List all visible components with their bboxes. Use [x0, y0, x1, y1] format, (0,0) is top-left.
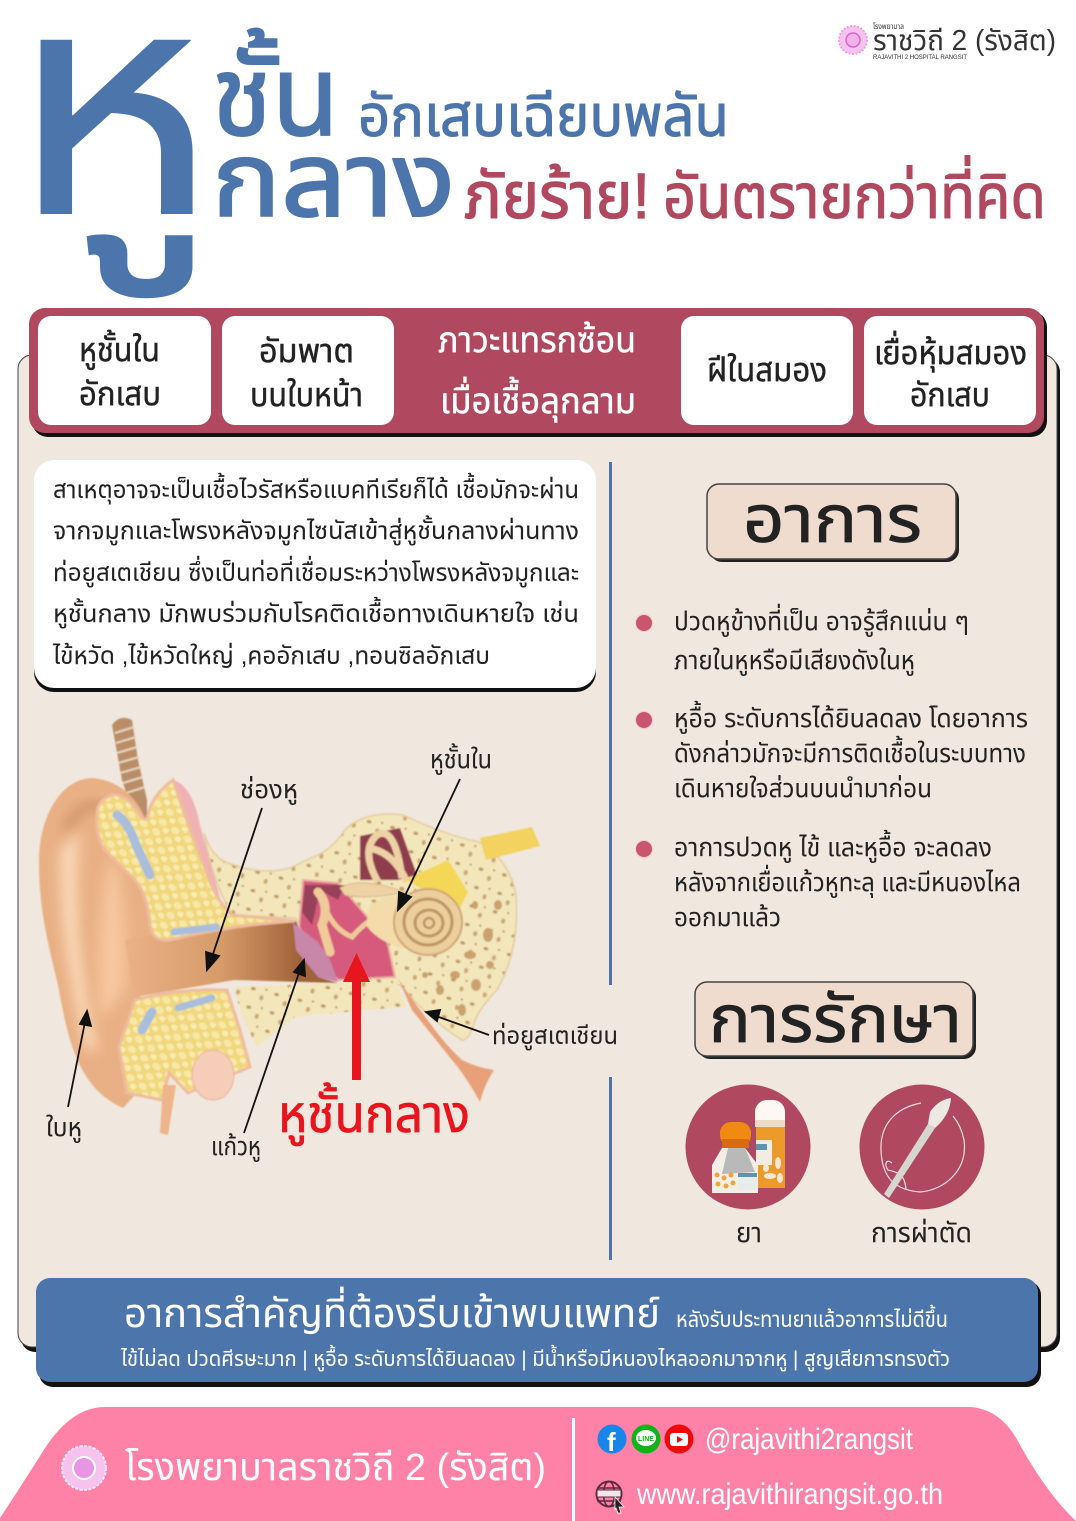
icon: youtube — [664, 1424, 694, 1454]
label: inner ear: หูชั้นใน — [430, 743, 492, 775]
heading: symptoms — [707, 482, 959, 562]
icon: surgery — [860, 1084, 984, 1210]
icon: line — [632, 1424, 660, 1454]
panel: main beige — [18, 355, 1060, 1352]
card: brain abscess — [681, 316, 853, 425]
band heading: ภาวะแทรกซ้อน — [438, 319, 636, 360]
icon: website globe — [596, 1482, 624, 1513]
label: eustachian tube: ท่อยูสเตเชียน — [492, 1022, 618, 1051]
symptom 3: หลังจากเยื่อแก้วหูทะลุ และมีหนองไหล — [674, 864, 1021, 898]
bullet 2 — [636, 712, 652, 728]
title: ภัยร้าย! — [464, 160, 650, 232]
footer logo — [62, 1446, 106, 1490]
leader lines — [68, 779, 489, 1133]
band heading: เมื่อเชื้อลุกลาม — [440, 376, 636, 422]
bullet 3 — [636, 840, 652, 858]
card: inner ear infection: อักเสบ — [79, 375, 161, 412]
band heading — [438, 319, 636, 422]
card: facial paralysis: อัมพาต — [259, 332, 354, 369]
hospital logo top right: ราชวิถี 2 (รังสิต) — [873, 25, 1056, 57]
text block: causes: ไข้หวัด ,ไข้หวัดใหญ่ ,คออักเสบ ,ทอนซิลอักเสบ — [52, 642, 490, 670]
title: อันตรายกว่าที่คิด — [663, 155, 1046, 232]
website url: www.rajavithirangsit.go.th — [636, 1478, 943, 1511]
divider lower — [609, 1077, 612, 1260]
text block: causes — [34, 460, 596, 692]
title: อักเสบเฉียบพลัน — [358, 84, 729, 149]
text block: causes: หูชั้นกลาง มักพบร่วมกับโรคติดเชื้อทางเดินหายใจ เช่น — [53, 596, 579, 629]
hospital logo top right: RAJAVITHI 2 HOSPITAL RANGSIT — [873, 54, 967, 61]
ear anatomy diagram — [39, 718, 618, 1162]
panel: urgent warning band: หลังรับประทานยาแล้วอาการไม่ดีขึ้น — [676, 1304, 948, 1332]
title — [9, 0, 1046, 298]
card: meningitis: เยื่อหุ้มสมอง — [874, 330, 1027, 373]
symptom 3 — [674, 829, 1021, 932]
text block: causes: ท่อยูสเตเชียน ซึ่งเป็นท่อที่เชื่อมระหว่างโพรงหลังจมูกและ — [53, 555, 579, 588]
card: meningitis — [864, 316, 1036, 425]
symptom 1: ปวดหูข้างที่เป็น อาจรู้สึกแน่น ๆ — [674, 603, 969, 637]
icon: facebook — [598, 1424, 626, 1457]
symptom 2: เดินหายใจส่วนบนนำมาก่อน — [674, 773, 932, 803]
social handle: @rajavithi2rangsit — [705, 1423, 914, 1456]
divider upper — [609, 462, 612, 985]
text block: causes: สาเหตุอาจจะเป็นเชื้อไวรัสหรือแบคทีเรียก็ได้ เชื้อมักจะผ่าน — [53, 472, 579, 505]
heading: symptoms: อาการ — [743, 482, 922, 556]
title: ชั้น — [212, 28, 339, 159]
card: brain abscess: ฝีในสมอง — [707, 351, 827, 388]
symptom list — [636, 603, 1028, 932]
hospital logo top right: โรงพยาบาล — [873, 22, 904, 31]
label: surgery: การผ่าตัด — [871, 1217, 972, 1248]
label: ear canal: ช่องหู — [240, 774, 298, 805]
icon: facebook: f — [607, 1427, 616, 1457]
hospital logo top right — [839, 22, 1056, 61]
card: facial paralysis — [222, 316, 394, 425]
label: eardrum: แก้วหู — [211, 1131, 261, 1162]
symptom 1: ภายในหูหรือมีเสียงดังในหู — [674, 645, 915, 676]
symptom 2: หูอื้อ ระดับการได้ยินลดลง โดยอาการ — [674, 700, 1028, 734]
ear artwork — [39, 718, 540, 1135]
card: meningitis: อักเสบ — [910, 376, 990, 413]
footer — [0, 1407, 1076, 1521]
card: facial paralysis: บนใบหน้า — [250, 376, 363, 413]
icon: medicine — [686, 1084, 810, 1210]
text block: causes: จากจมูกและโพรงหลังจมูกไซนัสเข้าสู่หูชั้นกลางผ่านทาง — [53, 514, 579, 546]
red arrow — [343, 953, 370, 1080]
title: กลาง — [212, 123, 455, 239]
symptom 3: อาการปวดหู ไข้ และหูอื้อ จะลดลง — [674, 829, 992, 863]
panel: urgent warning band — [36, 1278, 1041, 1387]
symptom 3: ออกมาแล้ว — [674, 902, 781, 932]
icon: line: LINE — [638, 1436, 654, 1443]
panel: urgent warning band: อาการสำคัญที่ต้องรีบเข้าพบแพทย์ — [124, 1286, 660, 1336]
symptom 1 — [674, 603, 969, 676]
panel: urgent warning band: ไข้ไม่ลด ปวดศีรษะมาก | หูอื้อ ระดับการได้ยินลดลง | มีน้ำหรือมีหนองไหลออกมาจากหู | สูญเสียการทรงตัว — [120, 1344, 950, 1372]
label: middle ear: หูชั้นกลาง — [278, 1082, 470, 1146]
label: medicine: ยา — [736, 1217, 762, 1248]
card: inner ear infection: หูชั้นใน — [79, 329, 160, 370]
panel: complications band — [29, 308, 1047, 437]
symptom 2 — [674, 700, 1028, 803]
hospital name: โรงพยาบาลราชวิถี 2 (รังสิต) — [125, 1447, 546, 1489]
bullet 1 — [636, 614, 652, 632]
card: inner ear infection — [38, 316, 211, 425]
symptom 2: ดังกล่าวมักจะมีการติดเชื้อในระบบทาง — [674, 735, 1026, 768]
label: pinna: ใบหู — [46, 1112, 82, 1143]
heading: treatment: การรักษา — [709, 982, 962, 1056]
